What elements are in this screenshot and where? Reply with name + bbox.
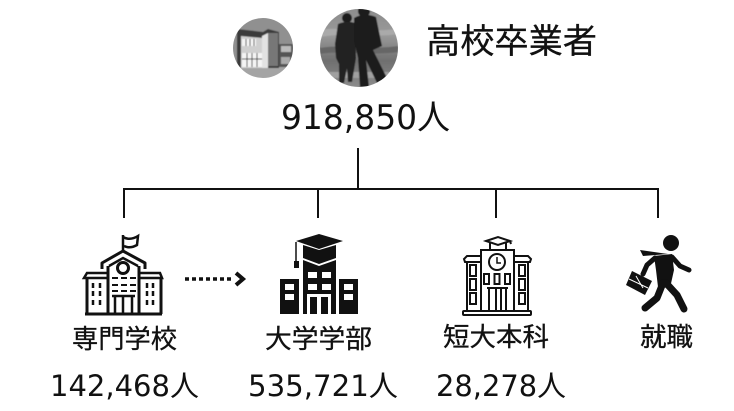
icon: briefcase <box>626 271 652 295</box>
label: junior college: 短大本科 <box>443 322 549 352</box>
heading: high school graduates: 高校卒業者 <box>426 23 597 61</box>
number: junior college: 28,278人 <box>436 369 566 403</box>
photo: school building <box>233 18 293 78</box>
number: university: 535,721人 <box>248 369 398 403</box>
icon: university with mortarboard <box>280 234 358 314</box>
icon: businessman walking <box>640 235 689 309</box>
label: vocational school: 専門学校 <box>72 324 177 354</box>
icon: vocational school <box>84 235 162 314</box>
label: university: 大学学部 <box>265 324 372 354</box>
icon: junior college with clock tower <box>463 237 531 315</box>
label: employment: 就職 <box>640 322 693 352</box>
number: vocational school: 142,468人 <box>50 369 199 403</box>
total number: 918,850人 <box>281 98 450 138</box>
tree connector lines <box>124 148 658 218</box>
arrow: dotted <box>185 273 243 285</box>
photo: couple <box>320 9 398 87</box>
